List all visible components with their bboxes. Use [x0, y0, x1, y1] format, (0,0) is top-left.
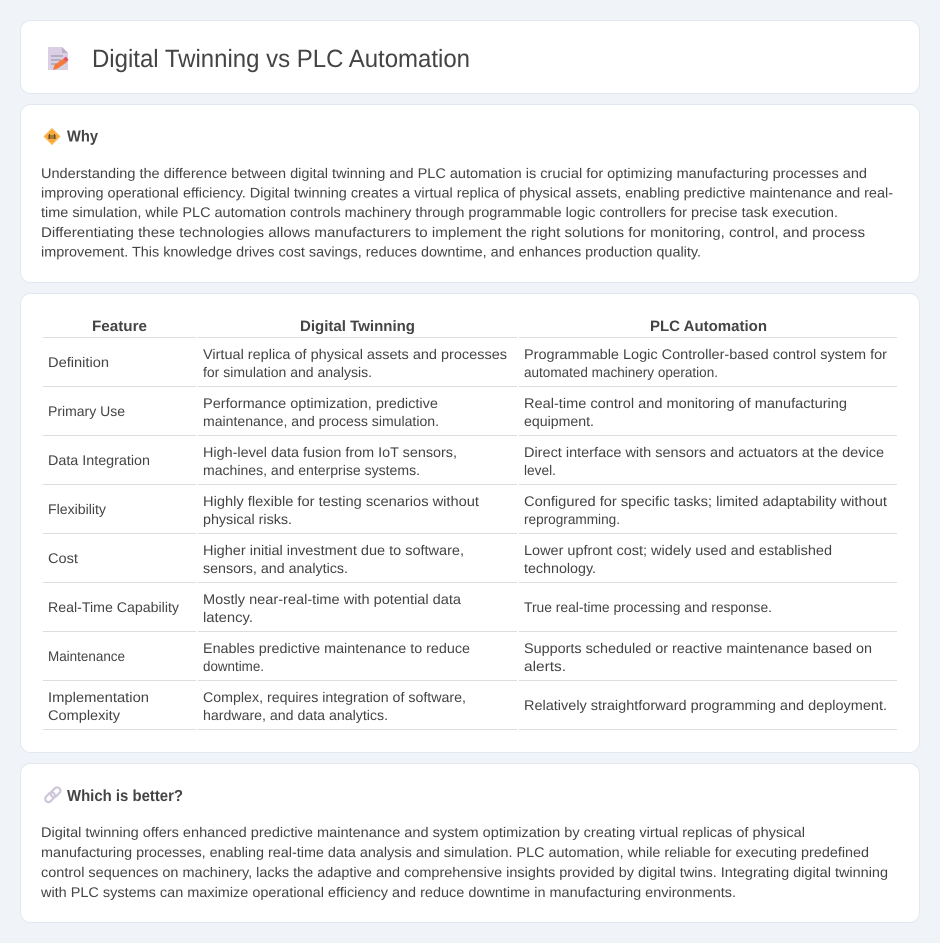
row: real-time capability [48, 591, 772, 625]
row: cost: Lower upfront cost; widely used and established [524, 542, 832, 558]
why paragraph: Differentiating these technologies allows manufacturers to implement the right solutions for monitoring, control, and process [41, 224, 865, 240]
row: cost [48, 542, 832, 576]
row: flexibility: reprogramming. [524, 511, 620, 527]
row: primary use: Primary Use [48, 403, 125, 419]
row: definition: Programmable Logic Controller-based control system for [524, 346, 887, 362]
row: primary use: Performance optimization, predictive [203, 395, 438, 411]
panel: why [20, 104, 920, 282]
row: implementation complexity: hardware, and data analytics. [203, 707, 388, 723]
row: real-time capability: Real-Time Capability [48, 599, 179, 615]
why paragraph: improving operational efficiency. Digital twinning creates a virtual replica of physical assets, enabling predictive maintenance and real- [41, 185, 893, 201]
row: primary use [48, 395, 847, 429]
row: flexibility: physical risks. [203, 511, 292, 527]
row: definition: Definition [48, 354, 109, 370]
row: real-time capability: Mostly near-real-time with potential data [203, 591, 461, 607]
row: definition: for simulation and analysis. [203, 364, 372, 380]
row: data integration: Data Integration [48, 452, 150, 468]
table header row [92, 318, 767, 335]
row: maintenance: alerts. [524, 658, 566, 674]
which is better paragraph: manufacturing processes, enabling real-time data analysis and simulation. PLC automation, while reliable for executing predefined [41, 844, 869, 860]
row: definition: Virtual replica of physical assets and processes [203, 346, 507, 362]
row: real-time capability: latency. [203, 609, 253, 625]
row: maintenance: Supports scheduled or reactive maintenance based on [524, 640, 872, 656]
why paragraph: time simulation, while PLC automation controls machinery through programmable logic controllers for precise task execution. [41, 204, 838, 220]
row: maintenance: downtime. [203, 658, 264, 674]
row: implementation complexity [48, 689, 887, 723]
row: data integration: High-level data fusion from IoT sensors, [203, 444, 457, 460]
title: Digital Twinning vs PLC Automation [92, 45, 470, 73]
row: data integration: Direct interface with sensors and actuators at the device [524, 444, 884, 460]
row: data integration: level. [524, 462, 556, 478]
why paragraph: Understanding the difference between digital twinning and PLC automation is crucial for optimizing manufacturing processes and [41, 165, 867, 181]
row: data integration: machines, and enterprise systems. [203, 462, 420, 478]
panel: which is better [20, 764, 920, 922]
row: flexibility: Configured for specific tasks; limited adaptability without [524, 493, 887, 509]
row: cost: Higher initial investment due to software, [203, 542, 464, 558]
which is better paragraph: control sequences on machinery, lacks the adaptive and comprehensive insights provided by digital twins. Integrating digital twinning [41, 864, 888, 880]
row: flexibility: Flexibility [48, 501, 106, 517]
row: primary use: maintenance, and process simulation. [203, 413, 439, 429]
row: definition: automated machinery operation. [524, 364, 718, 380]
row: definition [48, 346, 887, 380]
icon: warning diamond [44, 128, 60, 144]
panel: comparison table [20, 294, 920, 752]
row: maintenance: Enables predictive maintenance to reduce [203, 640, 470, 656]
table header row: Digital Twinning [300, 318, 415, 335]
row: primary use: equipment. [524, 413, 594, 429]
row: maintenance [48, 640, 872, 674]
icon: chain link [44, 786, 62, 803]
icon: memo with pencil [48, 47, 68, 70]
row: implementation complexity: Complex, requires integration of software, [203, 689, 466, 705]
heading: why: Why [67, 128, 98, 146]
row: implementation complexity: Relatively straightforward programming and deployment. [524, 697, 887, 713]
row: flexibility [48, 493, 887, 527]
row: maintenance: Maintenance [48, 648, 125, 664]
row: real-time capability: True real-time processing and response. [524, 599, 772, 615]
why paragraph: improvement. This knowledge drives cost savings, reduces downtime, and enhances production quality. [41, 243, 701, 259]
table header row: Feature [92, 318, 147, 335]
why paragraph [41, 165, 893, 259]
row: flexibility: Highly flexible for testing scenarios without [203, 493, 479, 509]
which is better paragraph: with PLC systems can maximize operational efficiency and reduce downtime in manufacturing environments. [40, 884, 736, 900]
which is better paragraph [40, 824, 888, 900]
row: data integration [48, 444, 884, 478]
heading: which is better: Which is better? [67, 788, 183, 805]
row: cost: Cost [48, 550, 78, 566]
row: primary use: Real-time control and monitoring of manufacturing [524, 395, 847, 411]
table header row: PLC Automation [650, 318, 767, 335]
row: cost: sensors, and analytics. [203, 560, 348, 576]
row: implementation complexity: Complexity [48, 707, 120, 723]
panel: title header [20, 20, 920, 94]
row: cost: technology. [524, 560, 596, 576]
row: implementation complexity: Implementation [48, 689, 149, 705]
which is better paragraph: Digital twinning offers enhanced predictive maintenance and system optimization by creating virtual replicas of physical [41, 824, 805, 840]
